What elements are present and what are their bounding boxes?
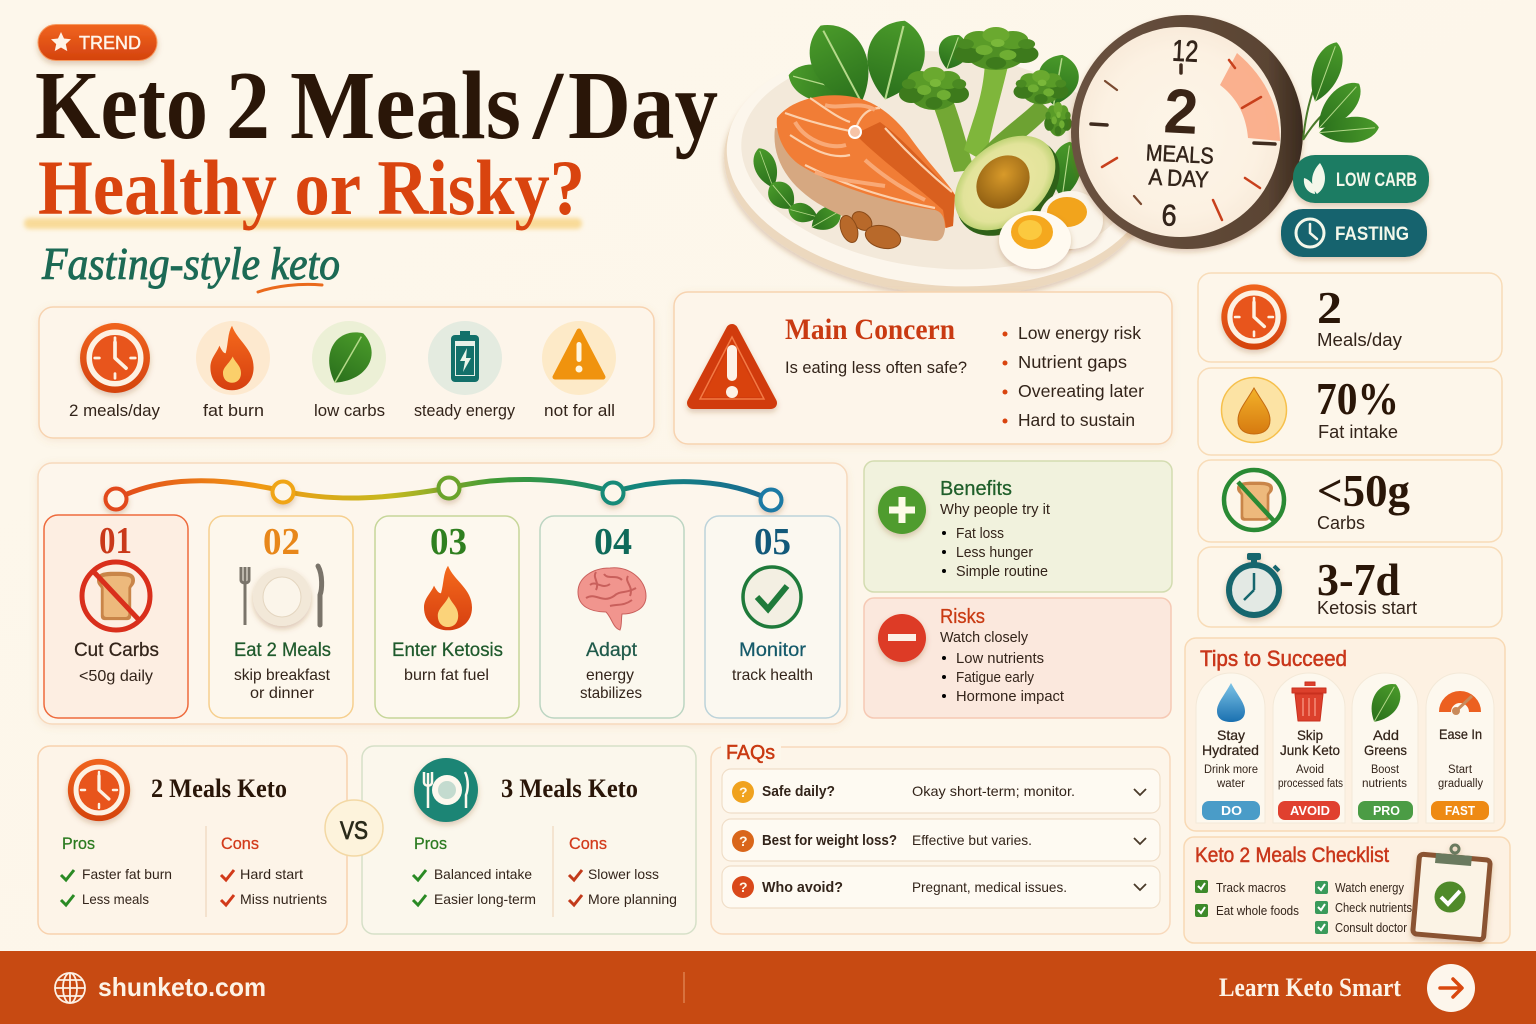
subtitle: Healthy or Risky? — [38, 144, 585, 231]
tip: junk keto: Avoid — [1296, 764, 1324, 776]
step 3: Enter Ketosis — [392, 640, 503, 661]
clock face — [1079, 27, 1281, 237]
heading: Tips to Succeed — [1200, 646, 1347, 671]
panel: quick facts icons — [39, 307, 654, 438]
panel: benefits — [864, 461, 1172, 592]
label: low carbs: low carbs — [314, 402, 385, 420]
tip: greens: Greens — [1364, 742, 1407, 758]
cons list: Miss nutrients — [240, 891, 327, 907]
icon: clipboard — [1413, 845, 1490, 940]
tip: hydrate: DO — [1221, 803, 1242, 818]
stat: ketosis start: Ketosis start — [1317, 598, 1417, 618]
clock numerals: 2 — [1162, 76, 1200, 148]
benefits list: Simple routine — [956, 564, 1048, 580]
label: fat burn: fat burn — [203, 402, 264, 420]
cons list: More planning — [588, 891, 677, 907]
subtitle highlight — [24, 218, 582, 229]
badge: fasting: FASTING — [1335, 224, 1409, 245]
step 2 — [209, 516, 353, 718]
pros list: Faster fat burn — [82, 866, 172, 882]
tip: hydrate: Stay — [1217, 727, 1245, 743]
tip: ease in: Start — [1448, 764, 1473, 776]
risks list — [942, 651, 1064, 705]
stat: fat intake: 70% — [1316, 373, 1399, 424]
step 3: 03 — [430, 521, 467, 563]
icon: clock — [80, 323, 150, 393]
panel: timeline — [38, 463, 847, 724]
tip: hydrate: water — [1216, 778, 1245, 790]
checklist column 1: Eat whole foods — [1216, 904, 1299, 918]
icon: globe — [55, 973, 85, 1003]
call to action: Learn Keto Smart — [1219, 973, 1401, 1002]
clock numerals: 12 — [1171, 35, 1199, 69]
tip: junk keto: AVOID — [1290, 803, 1330, 818]
faq row 3: Pregnant, medical issues. — [912, 879, 1067, 895]
checklist column 2: Check nutrients — [1335, 901, 1412, 915]
pros list: Easier long-term — [434, 891, 536, 907]
icon: plate — [414, 758, 478, 822]
badge: trend: TREND — [79, 32, 141, 53]
cons list: Cons — [221, 835, 259, 853]
tip: greens: Add — [1373, 727, 1399, 743]
icon: brain — [578, 568, 646, 630]
step 2: 02 — [263, 521, 300, 563]
faq row 3: Who avoid? — [762, 880, 843, 896]
step 1: 01 — [99, 520, 132, 562]
stat: ketosis start: 3-7d — [1317, 554, 1400, 605]
panel: checklist — [1184, 837, 1510, 943]
concern list: Nutrient gaps — [1018, 352, 1127, 372]
pros list — [61, 835, 172, 907]
tip: ease in — [1426, 673, 1494, 823]
step 1: Cut Carbs — [74, 640, 159, 661]
title: Day — [568, 52, 718, 159]
step 4: Adapt — [586, 640, 638, 661]
clock numerals: 6 — [1161, 199, 1177, 233]
benefits list — [942, 526, 1048, 580]
badge: fasting — [1281, 209, 1427, 257]
benefits list: Less hunger — [956, 545, 1033, 561]
tip: ease in: gradually — [1438, 778, 1483, 790]
broccoli — [899, 27, 1072, 172]
label: steady energy: steady energy — [414, 402, 516, 420]
footer — [0, 951, 1536, 1024]
icon: plate and cutlery — [241, 566, 322, 626]
panel: risks — [864, 598, 1171, 718]
icon: low carbs — [312, 321, 386, 395]
clock numerals — [1142, 33, 1220, 235]
label: not for all: not for all — [544, 402, 615, 420]
spinach leaves — [749, 13, 1094, 241]
stat: carbs — [1198, 460, 1502, 542]
concern list: Low energy risk — [1018, 323, 1141, 343]
step 2: skip breakfast — [234, 667, 331, 684]
pros list — [413, 835, 536, 907]
badge: low carb: LOW CARB — [1336, 170, 1417, 191]
step 5: Monitor — [739, 640, 807, 661]
icon: fat burn — [196, 321, 270, 395]
faq row 2: Best for weight loss? — [762, 833, 897, 849]
panel: risks: Risks — [940, 606, 985, 628]
label: 2 meals/day: 2 meals/day — [69, 402, 161, 420]
benefits list: Fat loss — [956, 526, 1004, 542]
panel: tips to succeed — [1185, 638, 1505, 831]
hero: plate of food — [712, 13, 1163, 316]
tip: hydrate: Drink more — [1204, 764, 1258, 776]
risks list: Hormone impact — [956, 689, 1064, 705]
boiled eggs — [999, 191, 1103, 269]
heading: Main Concern — [785, 313, 955, 346]
stat: meals per day: 2 — [1317, 282, 1342, 333]
cons list — [221, 835, 327, 907]
pros list: Pros — [62, 835, 95, 853]
badge: low carb — [1293, 155, 1429, 203]
concern list: Hard to sustain — [1018, 410, 1135, 430]
checklist column 2: Watch energy — [1335, 881, 1405, 895]
tip: greens: PRO — [1373, 803, 1400, 818]
panel: 2 meals keto — [38, 746, 347, 934]
tip: junk keto: Skip — [1297, 727, 1323, 743]
step 2: or dinner — [250, 685, 315, 702]
tip: greens — [1352, 673, 1418, 823]
panel: 3 meals keto: 3 Meals Keto — [501, 774, 638, 803]
faq row 1: Okay short-term; monitor. — [912, 783, 1075, 799]
stat: fat intake — [1198, 368, 1502, 455]
url: shunketo.com — [98, 972, 266, 1002]
concern list — [1002, 323, 1144, 430]
concern list: Overeating later — [1018, 381, 1144, 401]
checklist column 2: Consult doctor — [1335, 921, 1407, 935]
panel: benefits: Benefits — [940, 478, 1012, 500]
icon: arrow button — [1427, 964, 1475, 1012]
cons list: Slower loss — [588, 866, 659, 882]
panel: main concern — [674, 292, 1172, 444]
step 4 — [540, 516, 684, 718]
tagline: Fasting-style keto — [41, 239, 340, 289]
cons list — [569, 835, 677, 907]
tip: junk keto: Junk Keto — [1280, 742, 1340, 758]
faq row 3 — [722, 866, 1160, 908]
stat: carbs: Carbs — [1317, 513, 1365, 533]
title: / — [532, 52, 564, 159]
step 5: track health — [732, 667, 813, 684]
step 2: Eat 2 Meals — [234, 640, 331, 661]
faq row 2: ? — [739, 833, 748, 849]
stat: fat intake: Fat intake — [1318, 422, 1398, 442]
stat: carbs: <50g — [1317, 465, 1410, 516]
clock numerals: MEALS — [1145, 139, 1214, 169]
hero: clock — [1071, 15, 1303, 249]
title — [35, 52, 718, 159]
step 1: <50g daily — [79, 668, 153, 685]
panel: 3 meals keto — [362, 746, 696, 934]
step 1 — [44, 515, 188, 718]
faq row 1 — [722, 769, 1160, 813]
vs badge: VS — [340, 817, 368, 845]
clock rim — [1071, 15, 1303, 249]
icon: minus — [878, 614, 926, 662]
salmon steak — [774, 95, 955, 241]
checklist column 1 — [1195, 880, 1299, 918]
almonds — [837, 208, 903, 252]
icon: flame — [424, 566, 472, 630]
vs badge — [325, 800, 383, 856]
clock numerals: A DAY — [1148, 163, 1209, 193]
icon: plus — [878, 486, 926, 534]
risks list: Fatigue early — [956, 670, 1035, 686]
checklist column 2 — [1315, 881, 1412, 935]
panel: 2 meals keto: 2 Meals Keto — [151, 774, 287, 803]
title: Meals — [290, 52, 521, 159]
fasting wedge — [1220, 53, 1280, 141]
checklist column 1: Track macros — [1216, 881, 1286, 895]
icon: steady energy — [428, 321, 502, 395]
cons list: Hard start — [240, 866, 303, 882]
tip: greens: nutrients — [1362, 778, 1407, 790]
heading: FAQs — [726, 742, 775, 764]
tip: ease in: FAST — [1445, 803, 1475, 818]
heading: Keto 2 Meals Checklist — [1195, 844, 1389, 867]
panel: faqs — [711, 738, 1170, 934]
question: Is eating less often safe? — [785, 358, 967, 377]
tip: junk keto: processed fats — [1278, 778, 1343, 790]
tip: greens: Boost — [1371, 764, 1400, 776]
faq row 2: Effective but varies. — [912, 832, 1032, 848]
title: Keto — [35, 52, 208, 159]
badge: trend — [38, 24, 157, 60]
icon: not for all — [542, 321, 616, 395]
step 3: burn fat fuel — [404, 667, 489, 684]
tip: junk keto — [1273, 673, 1345, 823]
timeline nodes — [106, 478, 782, 510]
panel: benefits: Why people try it — [940, 502, 1050, 518]
icon: clock — [68, 759, 130, 821]
step 4: 04 — [594, 521, 632, 563]
timeline path — [116, 479, 771, 500]
step 5 — [705, 516, 840, 718]
decorative leaves: right sprig — [1303, 38, 1380, 145]
faq row 1: ? — [739, 784, 748, 800]
title: 2 — [226, 52, 270, 159]
clock ticks — [1091, 65, 1275, 144]
step 5: 05 — [754, 521, 791, 563]
stat: meals per day — [1198, 273, 1502, 362]
tip: hydrate: Hydrated — [1202, 742, 1259, 758]
step 3 — [375, 516, 519, 718]
tip: ease in: Ease In — [1439, 726, 1482, 742]
avocado — [936, 116, 1079, 256]
pros list: Balanced intake — [434, 866, 532, 882]
step 4: stabilizes — [580, 685, 642, 702]
step 4: energy — [586, 667, 634, 684]
tip: hydrate — [1196, 673, 1265, 823]
pros list: Pros — [414, 835, 447, 853]
faq row 2 — [722, 819, 1160, 861]
icon: warning triangle — [693, 330, 771, 403]
faq row 1: Safe daily? — [762, 784, 835, 800]
risks list: Low nutrients — [956, 651, 1044, 667]
faq row 3: ? — [739, 879, 748, 895]
icon: check circle — [743, 567, 801, 627]
panel: risks: Watch closely — [940, 630, 1029, 646]
pros list: Less meals — [82, 891, 149, 907]
stat: ketosis start — [1198, 547, 1502, 627]
icon: no bread — [82, 562, 150, 630]
stat: meals per day: Meals/day — [1317, 330, 1402, 350]
plate — [712, 23, 1163, 316]
cons list: Cons — [569, 835, 607, 853]
